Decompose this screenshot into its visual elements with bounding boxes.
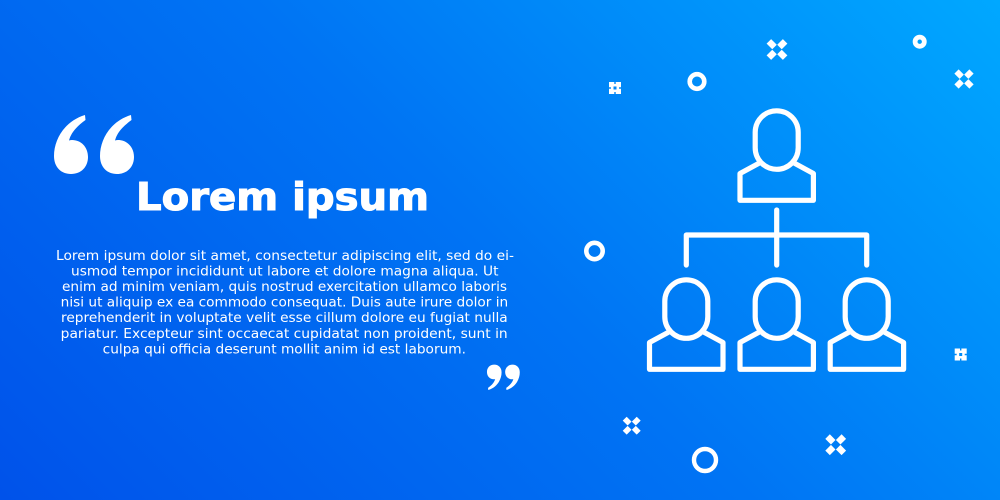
org chart icon — [650, 111, 904, 369]
decorative cross top right — [949, 64, 979, 94]
body text block: nisi ut aliquip ex ea commodo consequat. Duis aute irure dolor in — [61, 296, 508, 311]
decorative ring bottom — [694, 449, 716, 471]
person: right report — [830, 280, 904, 369]
decorative ring top — [690, 74, 704, 89]
body text block: pariatur. Excepteur sint occaecat cupidatat non proident, sunt in — [61, 327, 508, 342]
body text block: usmod tempor incididunt ut labore et dolore magna aliqua. Ut — [71, 264, 498, 279]
person: top manager — [740, 111, 813, 200]
decorative cross bottom left — [618, 412, 646, 440]
body text block: Lorem ipsum dolor sit amet, consectetur adipiscing elit, sed do ei- — [56, 249, 514, 264]
decorative cross bottom right — [819, 428, 852, 461]
icon: opening quotation mark — [54, 115, 134, 174]
decorative ring small top right — [915, 37, 924, 46]
decorative ring left — [586, 243, 603, 259]
decorative cross top — [761, 33, 793, 66]
person: middle report — [740, 280, 813, 369]
person: left report — [650, 280, 723, 369]
connector lines — [686, 210, 867, 265]
body text block: culpa qui officia deserunt mollit anim id est laborum. — [103, 342, 466, 357]
icon: closing quotation mark — [487, 365, 520, 390]
body text block — [56, 249, 514, 357]
body text block: enim ad minim veniam, quis nostrud exercitation ullamco laboris — [62, 280, 507, 295]
decorative small knot bottom right — [955, 348, 967, 360]
body text block: reprehenderit in voluptate velit esse cillum dolore eu fugiat nulla — [61, 311, 508, 326]
decorative small knot top left — [609, 82, 621, 94]
title: Lorem ipsum — [136, 175, 429, 219]
